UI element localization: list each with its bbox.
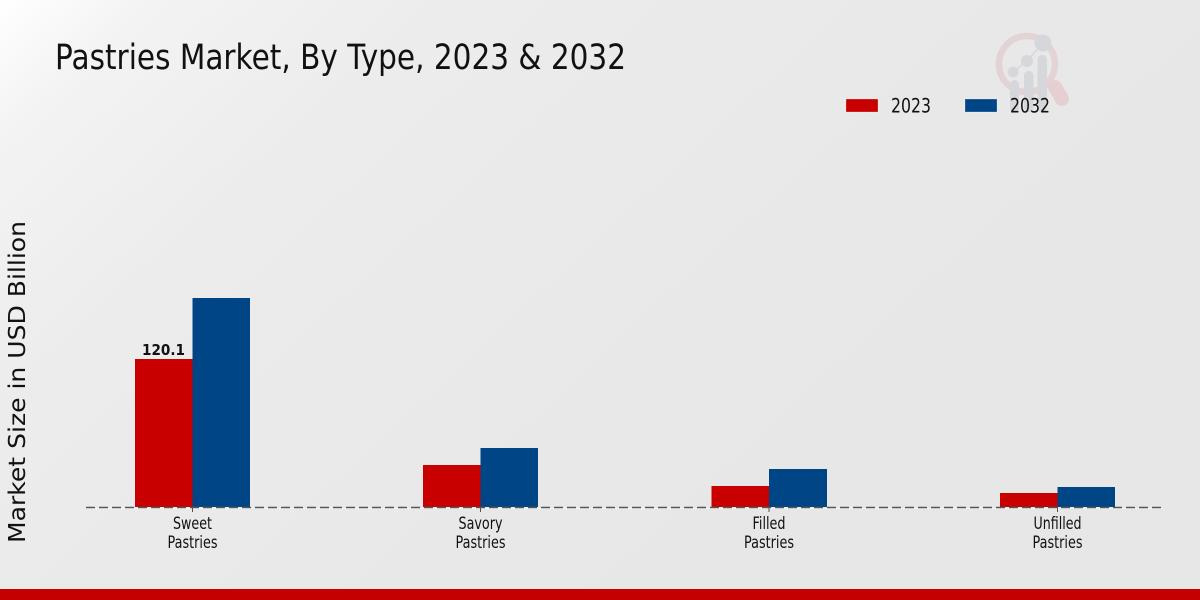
legend item: 2032: 2032 (1010, 94, 1050, 118)
category label: sweet pastries (168, 514, 218, 552)
bars: unfilled pastries (1000, 487, 1115, 507)
category label: savory pastries: Savory (458, 514, 503, 533)
legend item: 2023: 2023 (891, 94, 931, 118)
legend item: 2032 (965, 94, 1050, 118)
y axis title: Market Size in USD Billion (5, 221, 31, 543)
bars: filled pastries (712, 469, 827, 507)
data label: 120.1: 120.1 (142, 341, 185, 359)
category label: unfilled pastries: Pastries (1032, 533, 1082, 552)
title: Pastries Market, By Type, 2023 & 2032 (55, 38, 626, 78)
category label: sweet pastries: Sweet (173, 514, 212, 533)
legend (846, 94, 1050, 118)
category label: savory pastries: Pastries (456, 533, 506, 552)
legend item: 2023 (846, 94, 931, 118)
category label: unfilled pastries: Unfilled (1034, 514, 1082, 533)
bar chart (86, 298, 1163, 512)
category label: filled pastries: Filled (752, 514, 786, 533)
category label: savory pastries (456, 514, 506, 552)
footer bar (0, 589, 1200, 600)
category label: sweet pastries: Pastries (168, 533, 218, 552)
category label: unfilled pastries (1032, 514, 1082, 552)
category label: filled pastries (744, 514, 794, 552)
category label: filled pastries: Pastries (744, 533, 794, 552)
bars: sweet pastries (135, 298, 250, 507)
logo watermark (999, 34, 1062, 112)
bars: savory pastries (423, 448, 538, 507)
